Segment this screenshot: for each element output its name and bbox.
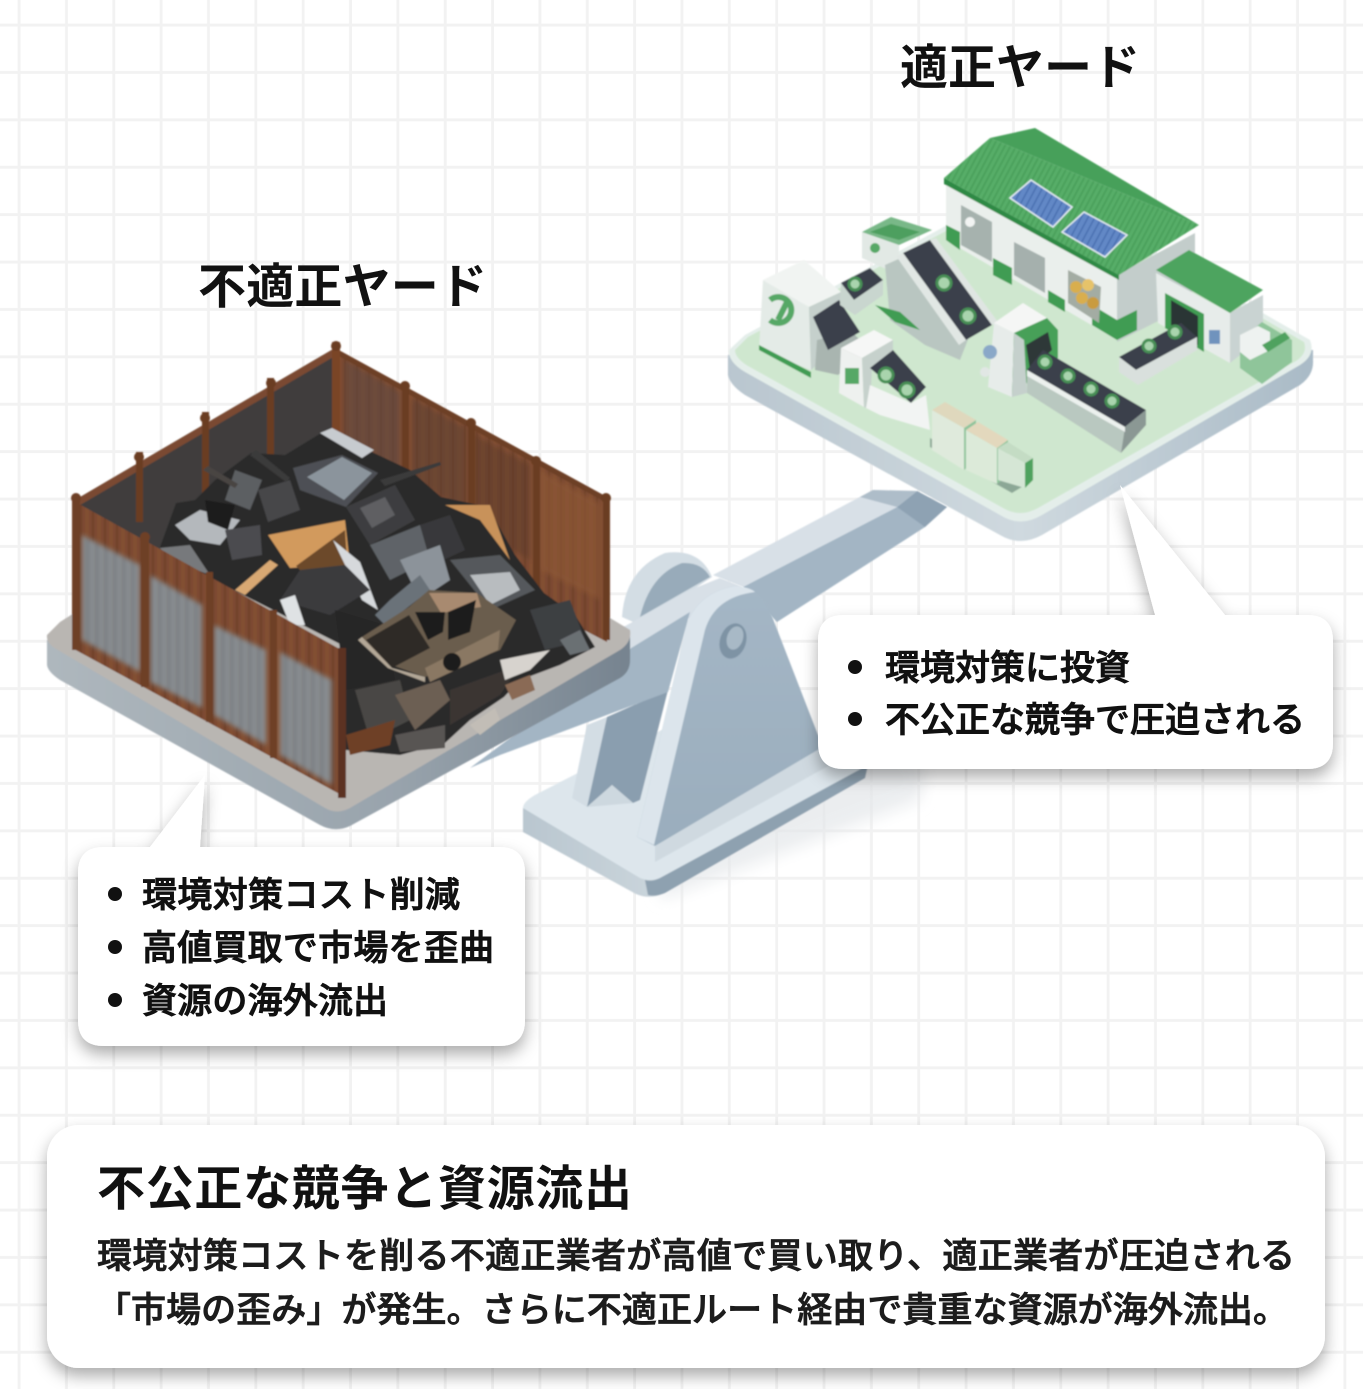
long conveyor arch	[988, 323, 1014, 397]
bullet list: 資源の海外流出	[142, 982, 388, 1021]
scrap pile	[160, 428, 595, 755]
left platform: improper yard	[47, 341, 630, 829]
bullet list: 環境対策に投資	[885, 649, 1130, 688]
summary card	[47, 1125, 1325, 1368]
fulcrum base plate	[523, 762, 868, 897]
callout bubble	[818, 485, 1333, 769]
incline tower	[862, 232, 899, 275]
platform base	[728, 350, 1313, 541]
dark conveyor left	[815, 332, 870, 375]
callout: improper yard	[78, 775, 525, 1046]
bullet list	[108, 876, 494, 1021]
bullet list: 環境対策コスト削減	[142, 876, 460, 915]
lower conveyor	[870, 350, 926, 403]
rusted wrecked car	[358, 590, 516, 682]
recycling crates	[930, 438, 1033, 493]
fulcrum pivot bolt	[715, 620, 751, 662]
bullet list: 高値買取で市場を歪曲	[142, 929, 494, 968]
beam left section	[600, 578, 743, 652]
panel: summary	[47, 1125, 1325, 1368]
back fence posts	[136, 452, 143, 522]
seesaw beam	[713, 490, 947, 622]
fulcrum back plate	[622, 552, 712, 625]
seesaw fulcrum	[470, 552, 925, 900]
callout: proper yard	[818, 485, 1333, 769]
heading: improper yard: 不適正ヤード	[198, 261, 487, 314]
second sorter machine	[839, 348, 864, 407]
summary heading: 不公正な競争と資源流出	[97, 1163, 632, 1216]
warehouse doors	[961, 205, 992, 262]
back left fence wall	[75, 348, 335, 640]
upper feed conveyor	[841, 268, 883, 300]
recycling bales right	[1240, 322, 1292, 384]
summary body: 「市場の歪み」が発生。さらに不適正ルート経由で貴重な資源が海外流出。	[96, 1291, 1288, 1330]
bullet list: 不公正な競争で圧迫される	[885, 701, 1305, 740]
long conveyor	[1027, 370, 1125, 453]
left recycling machine	[759, 280, 811, 370]
bullet list	[848, 649, 1305, 740]
fulcrum ground shadow	[660, 690, 925, 900]
annex building	[1156, 273, 1230, 363]
platform base	[47, 635, 630, 829]
warehouse roof	[990, 128, 1199, 225]
front fence wall	[71, 493, 346, 798]
callout bubble	[78, 775, 525, 1046]
solar panels	[1010, 180, 1072, 227]
fulcrum front plate	[637, 586, 826, 846]
summary body	[96, 1237, 1295, 1330]
incline conveyor	[903, 240, 992, 340]
back right fence wall	[335, 348, 607, 642]
heading: proper yard: 適正ヤード	[900, 42, 1140, 95]
right platform: proper yard	[728, 128, 1313, 541]
warehouse walls	[946, 182, 1117, 340]
summary body: 環境対策コストを削る不適正業者が高値で買い取り、適正業者が圧迫される	[97, 1237, 1295, 1276]
annex conveyor	[1119, 323, 1197, 370]
